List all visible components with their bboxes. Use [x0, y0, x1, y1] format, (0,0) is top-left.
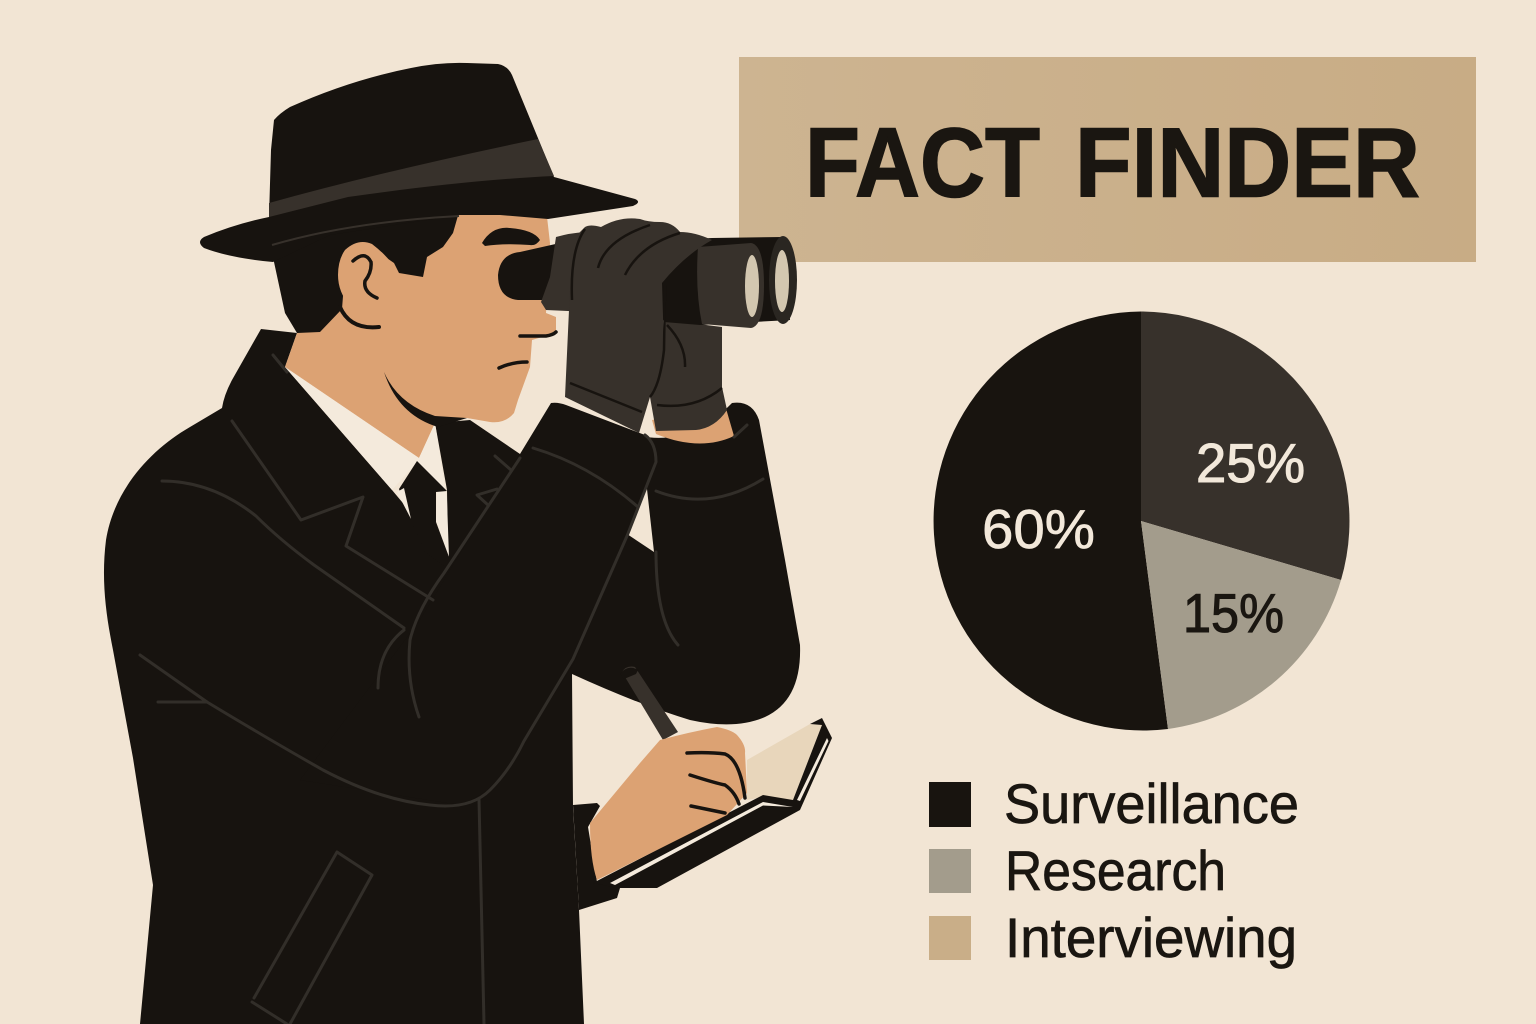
rear wrist skin [652, 405, 734, 444]
detective figure [104, 63, 832, 1024]
rear arm sleeve [555, 403, 800, 724]
legend swatch: interviewing [929, 916, 971, 960]
notebook [593, 718, 832, 888]
legend [929, 772, 1299, 969]
pen [620, 667, 678, 740]
coat body [104, 329, 584, 1024]
near lens [745, 255, 759, 317]
shirt collar [285, 367, 449, 557]
legend label: surveillance: Surveillance [1004, 772, 1299, 835]
coat seams [140, 355, 763, 1024]
eyepiece collar [541, 232, 590, 312]
nose line [520, 332, 556, 336]
notebook cover [593, 718, 832, 888]
eyepiece [498, 243, 570, 300]
label 25%: 25% [1196, 432, 1305, 494]
jaw shadow [384, 372, 467, 427]
notebook page edges [610, 738, 828, 885]
jaw line by ear [340, 307, 379, 327]
ear detail [353, 256, 377, 298]
tie white sliver [397, 488, 411, 519]
slice: 25% [1141, 312, 1349, 580]
pie chart [934, 312, 1349, 730]
far lens [775, 250, 789, 312]
brim line [272, 216, 459, 245]
hat crown and brim [200, 63, 638, 262]
front raised sleeve [300, 403, 656, 805]
front glove [565, 218, 712, 433]
writing sleeve cuff [573, 803, 620, 910]
bridge [650, 237, 790, 325]
far barrel [769, 236, 797, 324]
neck and face [285, 208, 556, 458]
title text: FACT [805, 108, 1040, 218]
rear glove [650, 320, 727, 431]
hat band [269, 139, 554, 217]
legend swatch: surveillance [929, 782, 971, 827]
label 60%: 60% [982, 498, 1095, 560]
slice: surveillance 60% [934, 312, 1168, 730]
notebook page [747, 724, 822, 800]
ear [338, 242, 394, 306]
rear glove details [657, 325, 722, 406]
eyebrow [482, 228, 540, 246]
legend label: interviewing: Interviewing [1005, 906, 1297, 969]
label 15%: 15% [1183, 582, 1284, 644]
writing hand [590, 727, 747, 880]
title banner [739, 57, 1476, 262]
necktie [399, 461, 449, 570]
near barrel [697, 243, 764, 328]
slice: 15% [1141, 521, 1341, 729]
title text: FINDER [1075, 108, 1420, 218]
hair [271, 212, 459, 333]
front glove details [570, 225, 680, 412]
legend label: research: Research [1005, 839, 1226, 902]
finger lines [687, 753, 745, 813]
legend swatch: research [929, 849, 971, 893]
mouth [499, 362, 527, 368]
binoculars [498, 232, 797, 328]
hat [200, 63, 638, 262]
title text [805, 108, 1420, 218]
